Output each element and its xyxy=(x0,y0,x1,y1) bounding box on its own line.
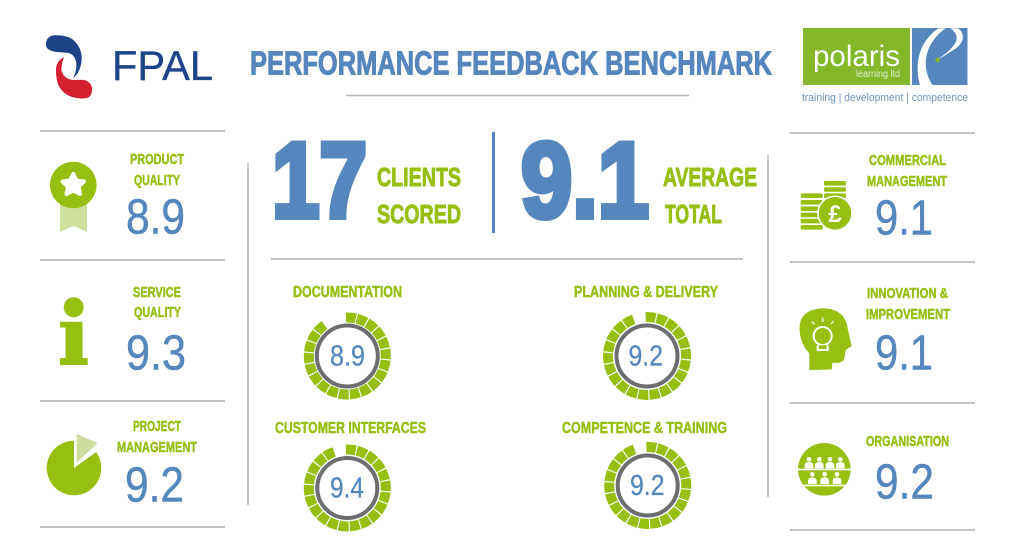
donut: competence and training 9.2 xyxy=(608,446,688,525)
panel: project management: PROJECT xyxy=(133,418,181,435)
icon: coins: £ xyxy=(828,201,842,228)
panel: project management: 9.2 xyxy=(125,458,184,512)
stat: 9.1 average total: 9.1 xyxy=(521,120,649,240)
donut: planning and delivery 9.2 xyxy=(607,316,687,396)
stat: 17 clients scored xyxy=(272,120,461,240)
panel: innovation and improvement: INNOVATION & xyxy=(867,285,948,302)
panel: customer interfaces xyxy=(275,420,426,528)
logo: Polaris: polaris xyxy=(813,40,900,73)
panel: customer interfaces: CUSTOMER INTERFACES xyxy=(275,420,426,437)
panel: service quality: 9.3 xyxy=(126,326,186,380)
panel: product quality: 8.9 xyxy=(126,190,185,244)
panel: innovation and improvement: 9.1 xyxy=(875,326,933,380)
panel: competence and training xyxy=(562,420,727,525)
panel: commercial management xyxy=(801,152,947,246)
icon: information xyxy=(60,297,88,365)
donut: documentation 8.9: 8.9 xyxy=(330,340,365,372)
stat: 17 clients scored: SCORED xyxy=(377,201,461,229)
donut: customer interfaces 9.4 xyxy=(307,448,387,528)
divider: stats xyxy=(492,132,495,233)
panel: documentation xyxy=(293,284,402,396)
panel: service quality: SERVICE xyxy=(133,284,181,301)
logo: Polaris: learning ltd xyxy=(856,69,900,80)
icon: head with light bulb xyxy=(800,308,852,370)
panel: commercial management: COMMERCIAL xyxy=(869,152,946,169)
logo: FPAL xyxy=(46,35,213,98)
donut: customer interfaces 9.4: 9.4 xyxy=(330,472,364,504)
donut: planning and delivery 9.2: 9.2 xyxy=(628,340,663,372)
stat: 9.1 average total xyxy=(521,120,757,240)
logo: Polaris: training | development | competence xyxy=(802,92,968,104)
panel: organisation xyxy=(798,433,949,510)
panel: project management: MANAGEMENT xyxy=(117,439,197,456)
stat: 9.1 average total: TOTAL xyxy=(665,201,722,229)
panel: competence and training: COMPETENCE & TRAINING xyxy=(562,420,727,437)
title: PERFORMANCE FEEDBACK BENCHMARK xyxy=(250,44,772,82)
logo: Polaris xyxy=(802,28,968,104)
panel: planning and delivery: PLANNING & DELIVERY xyxy=(574,284,719,301)
panel: organisation: ORGANISATION xyxy=(866,433,949,450)
logo: FPAL: FPAL xyxy=(112,42,213,89)
panel: project management xyxy=(47,418,197,512)
panel: service quality xyxy=(60,284,186,380)
icon: coins xyxy=(801,181,852,230)
panel: product quality xyxy=(50,151,185,244)
icon: pie chart xyxy=(47,434,101,495)
panel: product quality: PRODUCT xyxy=(130,151,184,168)
donut: competence and training 9.2: 9.2 xyxy=(630,470,664,502)
panel: commercial management: 9.1 xyxy=(875,192,933,246)
panel: planning and delivery xyxy=(574,284,719,396)
panel: innovation and improvement: IMPROVEMENT xyxy=(866,306,950,323)
icon: audience xyxy=(798,443,851,496)
panel: innovation and improvement xyxy=(800,285,950,380)
panel: product quality: QUALITY xyxy=(134,172,180,189)
panel: commercial management: MANAGEMENT xyxy=(867,173,947,190)
stat: 17 clients scored: 17 xyxy=(272,120,367,240)
panel: documentation: DOCUMENTATION xyxy=(293,284,402,301)
stat: 9.1 average total: AVERAGE xyxy=(663,164,757,192)
stat: 17 clients scored: CLIENTS xyxy=(377,164,461,192)
panel: service quality: QUALITY xyxy=(134,304,181,321)
panel: organisation: 9.2 xyxy=(875,456,934,510)
icon: medal xyxy=(50,162,97,232)
